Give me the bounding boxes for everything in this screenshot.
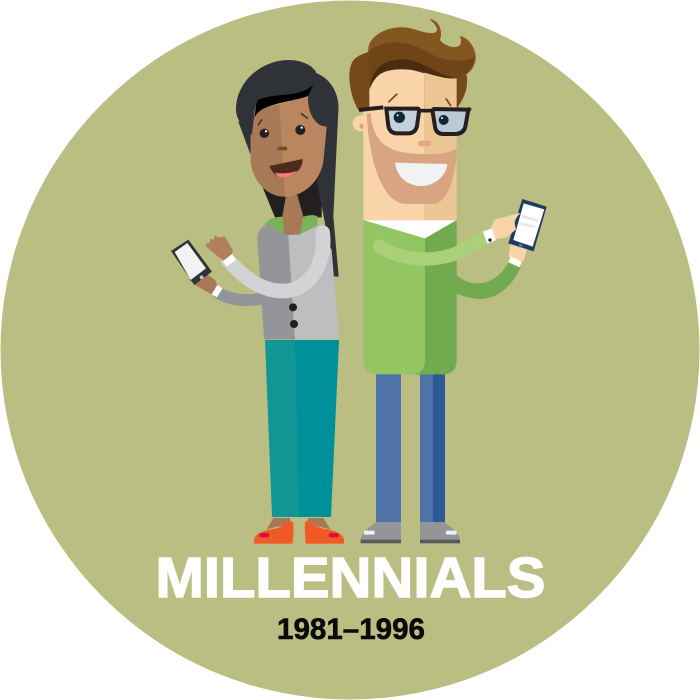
- beard: [367, 113, 457, 204]
- man shoes: [361, 522, 460, 543]
- hair lobe: [308, 73, 338, 126]
- back hair: [349, 52, 467, 110]
- hand on phone back: [509, 236, 527, 261]
- hair shadow band: [370, 59, 457, 88]
- right shoe: [305, 521, 344, 544]
- woman pants: [265, 340, 339, 517]
- fist: [206, 235, 233, 261]
- face right: [424, 72, 457, 220]
- cardigan right: [288, 225, 339, 339]
- mouth: [395, 163, 447, 186]
- phone: [508, 199, 547, 251]
- mouth: [269, 159, 303, 178]
- glasses: [359, 107, 472, 134]
- cardigan left: [257, 225, 295, 339]
- eyes: [260, 125, 305, 138]
- eyebrows: [388, 94, 451, 106]
- figure: man: [349, 19, 547, 543]
- nose: [418, 141, 431, 146]
- tongue: [275, 171, 298, 178]
- phone: [171, 240, 212, 285]
- pointing hand: [490, 213, 521, 239]
- front arm: [379, 237, 487, 259]
- hair back shadow: [262, 173, 322, 217]
- left hair strip: [238, 117, 255, 155]
- hair mid: [368, 42, 475, 85]
- rear arm: [455, 263, 521, 299]
- hair shadow: [254, 70, 317, 118]
- man legs: [376, 370, 445, 525]
- shirt left: [363, 220, 425, 374]
- nose: [277, 147, 287, 150]
- front arm: [228, 233, 323, 291]
- hair top: [368, 19, 476, 78]
- hand holding phone: [188, 272, 217, 294]
- left shoe: [254, 521, 294, 544]
- ear: [353, 115, 369, 131]
- man body: [363, 199, 547, 374]
- face: [251, 95, 327, 197]
- collar: [363, 220, 457, 238]
- cuffs: [212, 254, 236, 297]
- face left: [363, 67, 424, 220]
- collar: [264, 215, 318, 234]
- title: MILLENNIALS: [156, 546, 546, 610]
- cuffs: [483, 228, 522, 267]
- eyebrows: [258, 113, 308, 125]
- rear arm: [216, 291, 263, 300]
- date range: 1981–1996: [277, 613, 425, 646]
- figure: woman: [171, 60, 344, 544]
- neck: [282, 195, 303, 235]
- shirt right: [410, 220, 457, 374]
- man head: [349, 19, 476, 220]
- woman upper body: [171, 60, 339, 339]
- buttons: [289, 303, 297, 311]
- hair long right: [308, 73, 339, 277]
- woman feet: [254, 518, 344, 544]
- hair top: [236, 60, 317, 135]
